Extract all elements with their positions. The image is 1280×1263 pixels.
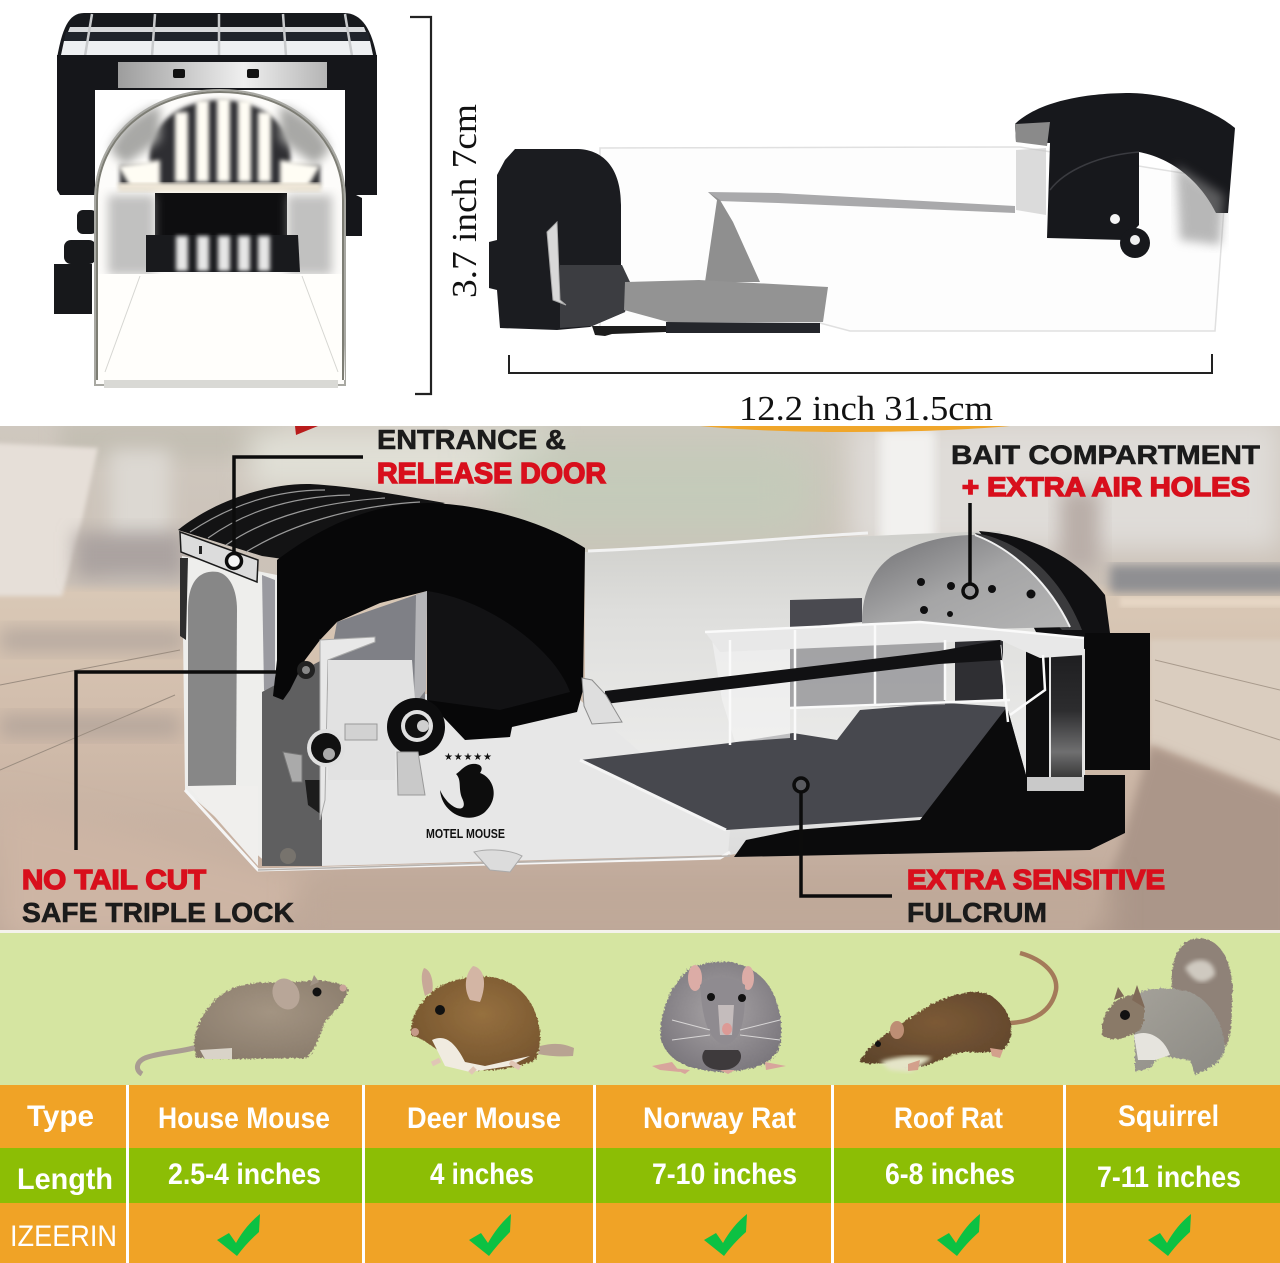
callout: extra sensitive fulcrum: EXTRA SENSITIVE bbox=[907, 864, 1165, 895]
orange row: brand bbox=[0, 1203, 1280, 1263]
dome face bbox=[862, 535, 1070, 632]
dimension bracket: length bbox=[509, 354, 1212, 373]
trigger rod bbox=[605, 640, 1002, 704]
animal: house mouse bbox=[137, 974, 348, 1074]
callout: entrance and release door: RELEASE DOOR bbox=[377, 458, 606, 490]
black frame bbox=[57, 55, 377, 236]
air holes bbox=[917, 578, 1036, 617]
animal types bbox=[158, 1100, 1219, 1135]
callout: bait compartment bbox=[951, 440, 1261, 598]
side knobs and block bbox=[54, 210, 97, 314]
row headings: IZEERIN bbox=[10, 1220, 117, 1253]
animal types: Squirrel bbox=[1118, 1100, 1219, 1133]
animal types: House Mouse bbox=[158, 1102, 330, 1135]
front foot tab bbox=[474, 850, 522, 872]
roof cage bbox=[57, 13, 377, 58]
black hood bbox=[178, 484, 585, 740]
callout: bait compartment: + EXTRA AIR HOLES bbox=[962, 472, 1250, 502]
panel: side view of trap bbox=[489, 93, 1235, 336]
clear flap bbox=[320, 637, 375, 820]
dimension label: height: 3.7 inch 7cm bbox=[445, 104, 484, 298]
window bright strip bbox=[414, 591, 427, 705]
animal: norway rat bbox=[652, 962, 786, 1074]
hood shadow on clear bbox=[1176, 165, 1224, 245]
animal: roof rat bbox=[860, 953, 1056, 1072]
row headings: Type bbox=[27, 1100, 94, 1133]
panel: animal comparison band bbox=[0, 930, 1280, 933]
green row: length bbox=[0, 1148, 1280, 1203]
callout: entrance and release door: ENTRANCE & bbox=[377, 424, 566, 455]
rod clip bbox=[582, 678, 622, 724]
outer gear bbox=[979, 531, 1110, 650]
right block bbox=[1085, 633, 1150, 770]
inner band bbox=[975, 533, 1082, 630]
side panel bbox=[320, 690, 730, 866]
column dividers bbox=[126, 1085, 1066, 1263]
main trap bbox=[178, 484, 1150, 872]
pivot screws bbox=[283, 661, 445, 795]
callout: entrance and release door bbox=[226, 424, 606, 568]
platform bbox=[624, 280, 828, 322]
clear arch body bbox=[95, 90, 345, 388]
animal lengths bbox=[168, 1158, 1241, 1194]
clear tube body bbox=[585, 531, 1085, 855]
logo: Motel Mouse bbox=[426, 752, 505, 841]
logo: Motel Mouse: ★★★★★ bbox=[444, 752, 492, 763]
end cap bbox=[489, 149, 630, 330]
panel: green animal background bbox=[0, 933, 1280, 1085]
window in hood bbox=[330, 591, 427, 720]
door latch bbox=[547, 222, 566, 305]
fulcrum wedge bbox=[705, 192, 760, 282]
hood inner arc bbox=[1050, 152, 1139, 190]
animal types: Deer Mouse bbox=[407, 1102, 561, 1135]
animal lengths: 4 inches bbox=[430, 1158, 534, 1191]
cap lower shade bbox=[560, 265, 630, 328]
callout: extra sensitive fulcrum bbox=[794, 778, 1165, 928]
logo: Motel Mouse: MOTEL MOUSE bbox=[426, 826, 505, 841]
callout: extra sensitive fulcrum: FULCRUM bbox=[907, 897, 1047, 928]
left opening bbox=[180, 556, 730, 870]
callout: no tail cut bbox=[22, 672, 294, 928]
clear tube bbox=[600, 147, 1226, 331]
fulcrum floor plate bbox=[580, 703, 1026, 830]
right black base bbox=[734, 707, 1125, 857]
animal types: Roof Rat bbox=[894, 1102, 1003, 1135]
callout: no tail cut: NO TAIL CUT bbox=[22, 864, 206, 895]
clear end box bbox=[1026, 640, 1050, 780]
blurred room background bbox=[0, 420, 1280, 940]
callout: no tail cut: SAFE TRIPLE LOCK bbox=[22, 897, 294, 928]
silver plate bbox=[118, 62, 327, 88]
clear bait cage bbox=[705, 622, 1084, 745]
dome edge bbox=[975, 535, 1070, 627]
check marks bbox=[217, 1214, 1191, 1256]
platform base bbox=[666, 322, 820, 333]
dimension bracket: height bbox=[410, 17, 431, 394]
tube top edge bbox=[588, 533, 868, 551]
panel: room photo with annotated trap bbox=[0, 420, 1280, 940]
animal lengths: 7-11 inches bbox=[1097, 1161, 1241, 1194]
trigger rod bbox=[708, 192, 1015, 213]
animal types: Norway Rat bbox=[643, 1102, 796, 1135]
panel: front view of trap bbox=[54, 13, 377, 388]
animal lengths: 6-8 inches bbox=[885, 1158, 1015, 1191]
dimension label: length: 12.2 inch 31.5cm bbox=[739, 389, 993, 428]
panel: page background bbox=[0, 0, 1280, 426]
table: comparison bbox=[0, 1085, 1280, 1263]
animal lengths: 2.5-4 inches bbox=[168, 1158, 321, 1191]
hood back bbox=[1015, 122, 1050, 146]
orange row: type bbox=[0, 1085, 1280, 1148]
pivot bbox=[1110, 214, 1150, 258]
animal: squirrel bbox=[1102, 938, 1232, 1075]
arch hood bbox=[1015, 93, 1235, 240]
callout: bait compartment: BAIT COMPARTMENT bbox=[951, 440, 1261, 470]
animal lengths: 7-10 inches bbox=[652, 1158, 797, 1191]
row headings: Length bbox=[17, 1163, 113, 1196]
silver plate bbox=[180, 532, 258, 582]
row headings bbox=[10, 1100, 117, 1253]
animal: deer mouse bbox=[411, 966, 574, 1073]
bait compartment bbox=[790, 531, 1150, 791]
